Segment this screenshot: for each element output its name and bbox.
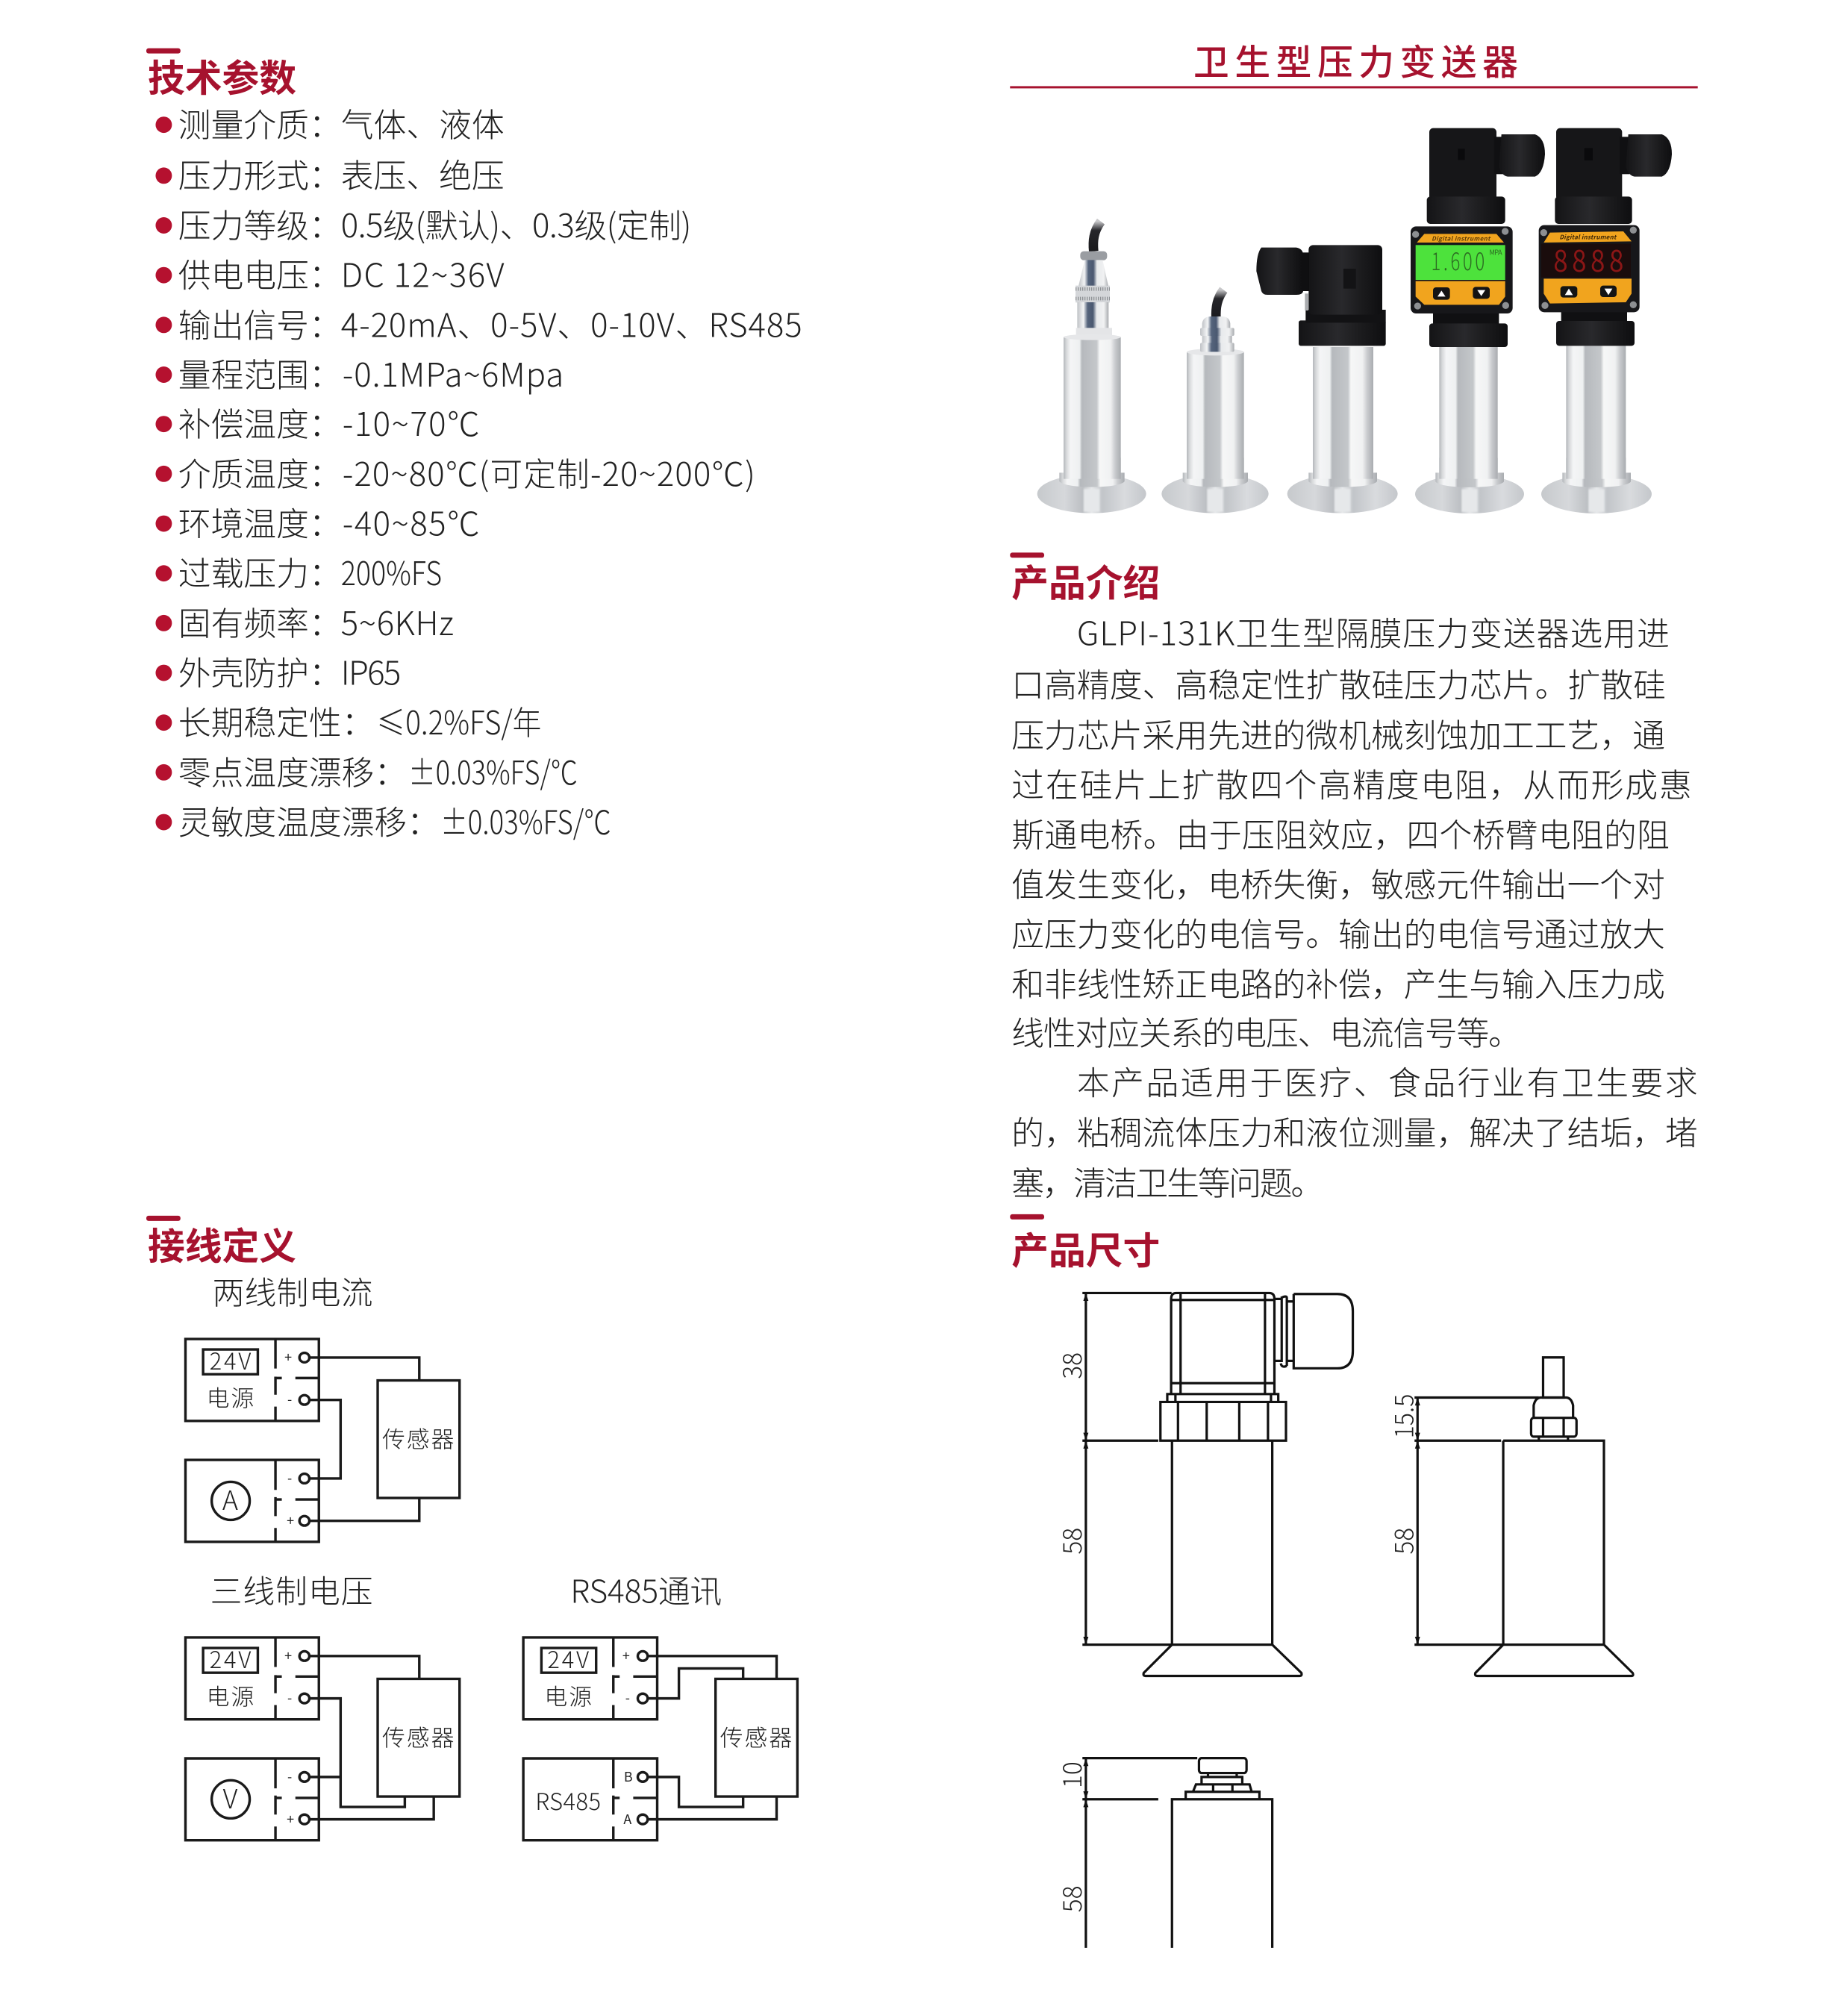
paragraph: product description: 过在硅片上扩散四个高精度电阻，从而形成惠 <box>1011 759 1692 807</box>
wiring diagram: two-wire current: + <box>287 1511 294 1530</box>
product photos: five transmitters <box>1037 128 1672 513</box>
bullet list: parameters: -20~80℃(可定制-20~200℃) <box>343 448 755 496</box>
bullet list: parameters: 压力等级： <box>178 199 342 247</box>
bullet list: parameters: 过载压力： <box>178 547 342 595</box>
panel: technical parameters <box>146 49 802 843</box>
heading accent: wiring <box>146 1216 181 1221</box>
dimension drawing: DIN connector version <box>1052 1293 1353 1676</box>
LCD instrument head, green: MPA <box>1489 246 1502 257</box>
wiring diagram: two-wire current: 24V <box>210 1343 251 1376</box>
wiring diagram: three-wire voltage: + <box>287 1809 294 1829</box>
dimension drawing: cable gland version: 15.5 <box>1385 1394 1421 1438</box>
paragraph: product description: 本产品适用于医疗、食品行业有卫生要求 <box>1077 1057 1698 1105</box>
wiring diagram: two-wire current: 传感器 <box>382 1420 454 1454</box>
wiring diagram: RS485: RS485 <box>535 1783 601 1817</box>
paragraph: product description: 和非线性矫正电路的补偿，产生与输入压力成 <box>1011 958 1665 1005</box>
wiring diagram: three-wire voltage: V <box>223 1778 238 1817</box>
bullet list: parameters: 200%FS <box>341 547 442 595</box>
LED instrument head, red: 8888 <box>1553 237 1623 281</box>
heading accent: technical parameters <box>146 49 181 54</box>
heading accent: introduction <box>1010 552 1044 558</box>
wiring diagram: two-wire current: 电源 <box>207 1380 254 1414</box>
wiring diagram: three-wire voltage: - <box>287 1688 292 1708</box>
paragraph: product description: 的，粘稠流体压力和液位测量，解决了结垢，堵 <box>1011 1106 1698 1154</box>
bullet list: parameters: 补偿温度： <box>178 398 342 446</box>
bullet list: parameters <box>155 99 802 843</box>
wiring diagram: RS485: 传感器 <box>720 1719 792 1752</box>
paragraph: product description: 应压力变化的电信号。输出的电信号通过放大 <box>1011 908 1665 956</box>
LCD instrument head, green <box>1411 226 1513 313</box>
product 3: DIN connector model <box>1256 245 1398 513</box>
wiring diagram: three-wire voltage: 传感器 <box>382 1719 454 1752</box>
wiring diagram: three-wire voltage: 24V <box>210 1641 251 1675</box>
bullet list: parameters: 介质温度： <box>178 448 342 496</box>
panel: product introduction <box>1010 552 1698 1205</box>
wiring diagram: RS485: 电源 <box>544 1679 592 1712</box>
bullet list: parameters: 测量介质： <box>178 99 342 146</box>
dimension drawing: cable gland version <box>1385 1358 1633 1676</box>
dimension drawing: low profile version: 58 <box>1052 1885 1089 1912</box>
LCD instrument head, green: Digital instrument <box>1432 235 1491 243</box>
wiring diagram: two-wire current <box>185 1339 460 1542</box>
main title: 卫生型压力变送器 <box>1193 34 1518 85</box>
bullet list: parameters: 固有频率： <box>178 597 342 645</box>
products 1 to 3: plug, gland and connector models <box>1037 222 1398 513</box>
wiring diagram: three-wire voltage: - <box>287 1767 292 1786</box>
bullet list: parameters: 5~6KHz <box>341 597 454 645</box>
LED instrument head, red: Digital instrument <box>1559 234 1617 242</box>
dimension drawing: low profile version: 10 <box>1052 1761 1089 1788</box>
product 5: red LED model <box>1539 128 1672 513</box>
bullet list: parameters: DC 12~36V <box>341 249 505 297</box>
paragraph: product description: 口高精度、高稳定性扩散硅压力芯片。扩散硅 <box>1011 658 1666 706</box>
bullet list: parameters: 0.5级(默认)、0.3级(定制) <box>341 199 691 247</box>
dimension drawing: cable gland version: 58 <box>1385 1528 1421 1555</box>
wiring diagram: RS485: - <box>625 1688 630 1708</box>
bullet list: parameters: 外壳防护： <box>178 646 342 694</box>
panel: wiring definitions <box>146 1216 797 1841</box>
LED instrument head, red <box>1539 225 1640 312</box>
product 1: aviation plug model <box>1037 222 1146 513</box>
dimension drawing: DIN connector version: 38 <box>1052 1352 1089 1379</box>
heading accent: dimensions <box>1010 1214 1044 1220</box>
wiring diagram: two-wire current: - <box>287 1468 292 1487</box>
paragraph: product description: 斯通电桥。由于压阻效应，四个桥臂电阻的阻 <box>1011 808 1670 856</box>
wiring diagram: RS485: 24V <box>547 1641 589 1675</box>
bullet list: parameters: ±0.03%FS/℃ <box>408 746 578 794</box>
heading: introduction: 产品介绍 <box>1011 554 1160 608</box>
heading: dimensions: 产品尺寸 <box>1011 1222 1160 1276</box>
bullet list: parameters: 零点温度漂移： <box>178 746 407 794</box>
wiring diagram: RS485: B <box>624 1767 633 1786</box>
paragraph: product description: 压力芯片采用先进的微机械刻蚀加工工艺，通 <box>1011 709 1665 757</box>
paragraph: product description: 值发生变化，电桥失衡，敏感元件输出一个对 <box>1011 858 1665 906</box>
product 2: cable gland model <box>1161 290 1269 513</box>
subheading: RS485 communication: RS485通讯 <box>570 1566 722 1612</box>
wiring diagram: three-wire voltage: 电源 <box>207 1679 254 1712</box>
wiring diagram: RS485: + <box>622 1646 630 1665</box>
wiring diagram: RS485: A <box>623 1809 631 1829</box>
bullet list: parameters: 环境温度： <box>178 497 342 545</box>
bullet list: parameters: 供电电压： <box>178 249 342 297</box>
title underline <box>1010 86 1698 88</box>
panel: product dimensions <box>1010 1214 1633 1948</box>
bullet list: parameters: IP65 <box>341 646 401 694</box>
wiring diagram: two-wire current: A <box>222 1479 238 1518</box>
subheading: two-wire current: 两线制电流 <box>213 1267 373 1314</box>
bullet list: parameters: -40~85℃ <box>343 497 480 545</box>
wiring diagram: three-wire voltage <box>185 1637 460 1841</box>
dimension drawing: low profile version <box>1052 1758 1273 1948</box>
subheading: three-wire voltage: 三线制电压 <box>210 1566 373 1612</box>
bullet list: parameters: -10~70℃ <box>343 398 480 446</box>
bullet list: parameters: 表压、绝压 <box>341 149 505 197</box>
paragraph: product description: 线性对应关系的电压、电流信号等。 <box>1011 1007 1521 1055</box>
wiring diagram: three-wire voltage: + <box>284 1646 292 1665</box>
bullet list: parameters: 压力形式： <box>178 149 342 197</box>
wiring diagram: two-wire current: + <box>284 1347 292 1367</box>
products 4 and 5: display models <box>1411 128 1672 513</box>
bullet list: parameters: 4-20mA、0-5V、0-10V、RS485 <box>341 299 802 346</box>
wiring diagram: two-wire current: - <box>287 1390 292 1409</box>
paragraph: product description: GLPI-131K卫生型隔膜压力变送器选用进 <box>1077 608 1670 655</box>
bullet list: parameters: -0.1MPa~6Mpa <box>343 349 564 396</box>
LCD instrument head, green: 1.600 <box>1431 243 1485 278</box>
bullet list: parameters: 输出信号： <box>178 299 342 346</box>
bullet list: parameters: ≤0.2%FS/年 <box>376 696 541 744</box>
bullet list: parameters: 灵敏度温度漂移： <box>178 796 440 843</box>
heading: technical parameters: 技术参数 <box>148 49 296 102</box>
bullet list: parameters: 量程范围： <box>178 349 342 396</box>
paragraph: product description <box>1011 608 1698 1205</box>
bullet list: parameters: 气体、液体 <box>341 99 505 146</box>
heading: wiring: 接线定义 <box>148 1217 296 1271</box>
product 4: green LCD model <box>1411 128 1545 513</box>
wiring diagram: RS485 <box>523 1637 797 1841</box>
paragraph: product description: 塞，清洁卫生等问题。 <box>1011 1157 1323 1205</box>
bullet list: parameters: ±0.03%FS/℃ <box>440 796 611 843</box>
bullet list: parameters: 长期稳定性： <box>178 696 374 744</box>
dimension drawing: DIN connector version: 58 <box>1052 1528 1089 1555</box>
